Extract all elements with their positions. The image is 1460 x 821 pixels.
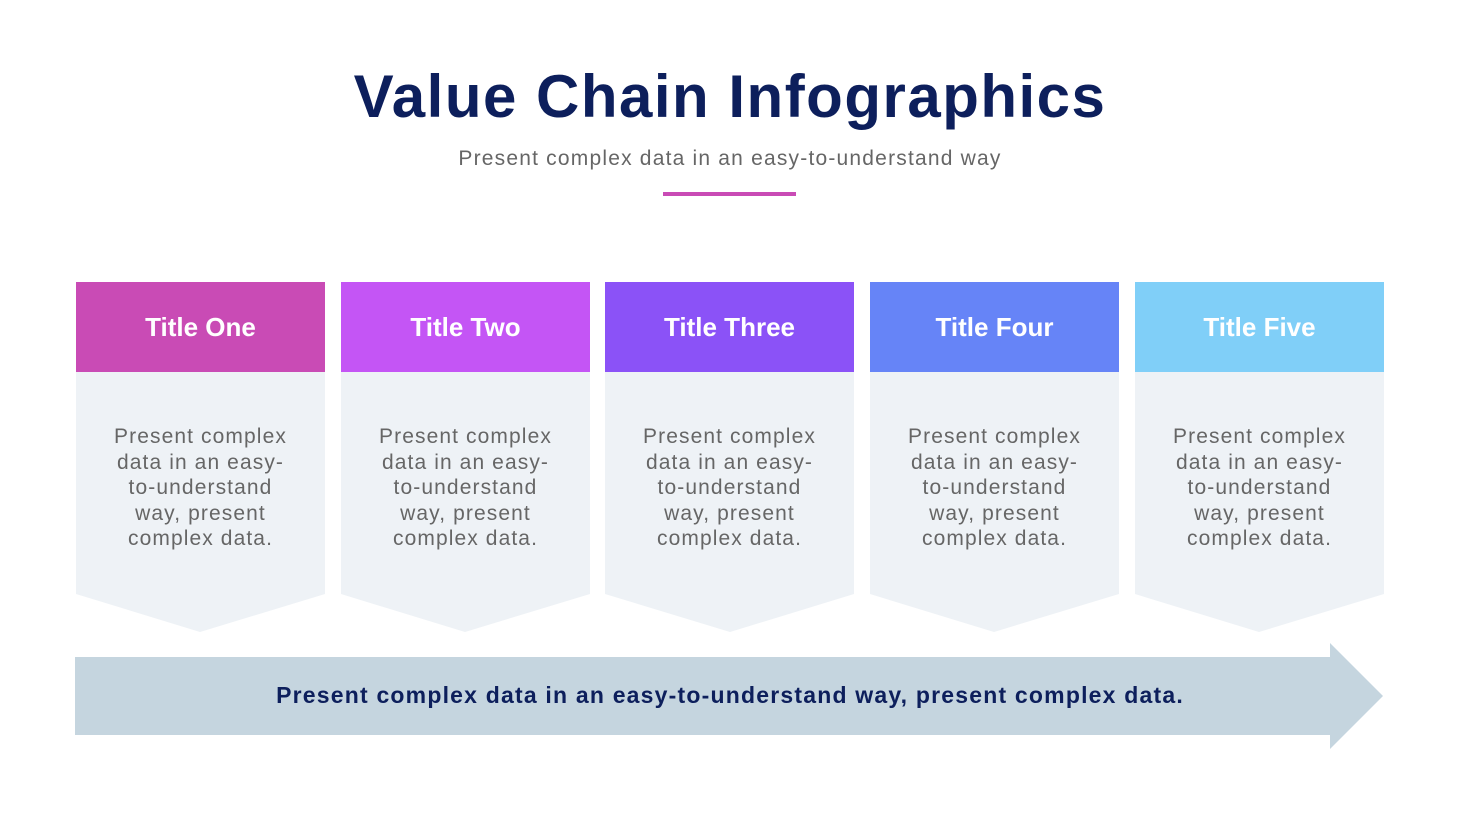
panel 3 text (643, 425, 816, 550)
panel 5 text: to-understand (1188, 476, 1331, 499)
panel 2 text: way, present (400, 502, 531, 524)
panel 4 text: data in an easy- (911, 450, 1078, 474)
panel 5 text (1173, 425, 1346, 550)
panel 5 text: complex data. (1187, 527, 1332, 550)
panel 5 text: data in an easy- (1176, 450, 1343, 474)
panel 4 text: to-understand (923, 476, 1066, 499)
panel 3 text: Present complex (643, 425, 816, 448)
title underline (663, 192, 796, 196)
panel 2 text: Present complex (379, 425, 552, 448)
panel 4 header: Title Four (936, 312, 1053, 342)
panel 3 text: complex data. (657, 527, 802, 550)
panel 1 text: Present complex (114, 425, 287, 448)
panel 3 header: Title Three (664, 312, 795, 342)
panel 3 header (605, 282, 854, 372)
title: Value Chain Infographics (354, 63, 1106, 130)
panel 2 text: to-understand (394, 476, 537, 499)
panel 5 text: Present complex (1173, 425, 1346, 448)
arrow text: Present complex data in an easy-to-understand way, present complex data. (276, 682, 1184, 708)
panel 1 text: complex data. (128, 527, 273, 550)
panel 2 text: complex data. (393, 527, 538, 550)
panel 1 header: Title One (145, 312, 256, 342)
panel 3 text: way, present (664, 502, 795, 524)
panel 4 text: way, present (929, 502, 1060, 524)
subtitle: Present complex data in an easy-to-understand way (458, 147, 1002, 170)
panel 2 header (341, 282, 590, 372)
panel 2 text (379, 425, 552, 550)
panel 4 text: Present complex (908, 425, 1081, 448)
panel 2 header: Title Two (410, 312, 521, 342)
panel 1 text: to-understand (129, 476, 272, 499)
panel 5 header: Title Five (1203, 312, 1316, 342)
panel 4 text: complex data. (922, 527, 1067, 550)
panel 1 text: data in an easy- (117, 450, 284, 474)
panel 5 header (1135, 282, 1384, 372)
panel 2 text: data in an easy- (382, 450, 549, 474)
panel 1 header (76, 282, 325, 372)
panel 1 text: way, present (135, 502, 266, 524)
panel 4 header (870, 282, 1119, 372)
panel 4 text (908, 425, 1081, 550)
panel 3 text: to-understand (658, 476, 801, 499)
panel 1 text (114, 425, 287, 550)
panel 3 text: data in an easy- (646, 450, 813, 474)
panel 5 text: way, present (1194, 502, 1325, 524)
